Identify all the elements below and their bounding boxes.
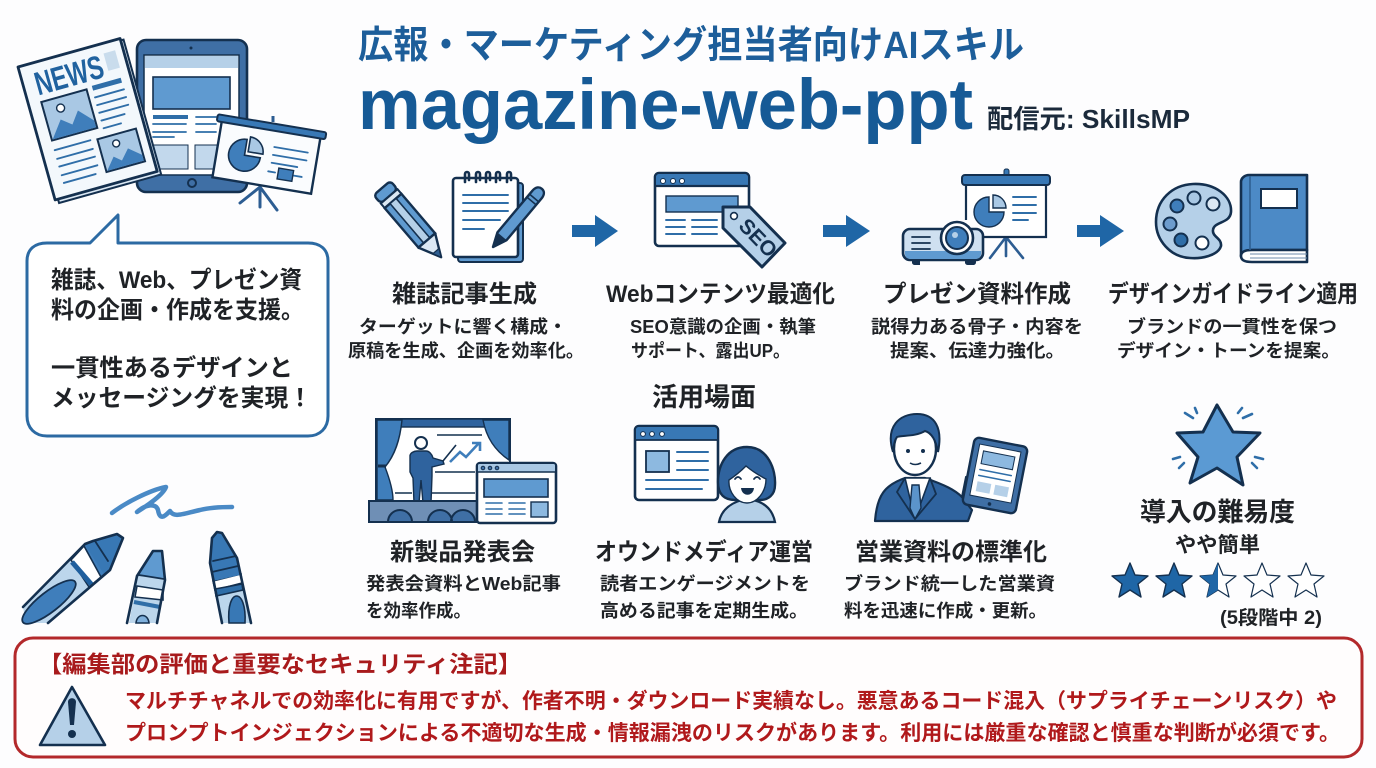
warning heading: 【編集部の評価と重要なセキュリティ注記】 — [38, 651, 522, 677]
crayon right — [210, 532, 251, 623]
callout text: 一貫性あるデザインと — [51, 354, 293, 382]
step 4: design guideline application — [1108, 175, 1358, 361]
source label: 配信元: SkillsMP — [987, 104, 1190, 134]
rating label: やや簡単 — [1175, 534, 1260, 557]
icon: crayons and scribble — [17, 487, 251, 630]
heading: Webコンテンツ最適化 — [606, 281, 835, 308]
icon: browser window and smiling woman — [635, 426, 775, 522]
panel: editorial evaluation and security warning — [15, 638, 1362, 757]
icon: newspaper: NEWS — [30, 48, 108, 102]
description: 提案、伝達力強化。 — [890, 340, 1065, 361]
callout text — [51, 266, 312, 412]
description: ターゲットに響く構成・ — [359, 316, 567, 337]
icon: presentation board tripod — [240, 116, 277, 210]
title: category line: 広報・マーケティング担当者向けAIスキル — [358, 25, 1024, 67]
icon: warning triangle — [40, 687, 105, 745]
description: を効率作成。 — [366, 600, 471, 621]
crayon left — [17, 534, 123, 630]
arrow 3 — [1077, 215, 1124, 247]
warning text: マルチチャネルでの効率化に有用ですが、作者不明・ダウンロード実績なし。悪意あるコード混入（サプライチェーンリスク）や — [125, 689, 1337, 713]
description — [871, 317, 1083, 361]
description — [630, 317, 816, 361]
description: 説得力ある骨子・内容を — [871, 317, 1083, 337]
scribble — [112, 487, 232, 517]
crayon middle — [127, 551, 165, 623]
icon: browser window — [655, 173, 749, 246]
heading: オウンドメディア運営 — [595, 538, 813, 566]
title: skill name: magazine-web-ppt — [358, 66, 973, 145]
icon: SEO tag — [723, 207, 785, 267]
heading: 営業資料の標準化 — [855, 539, 1047, 566]
use case 1: product launch — [366, 419, 561, 621]
description: 高める記事を定期生成。 — [600, 600, 808, 621]
star rating 2.5 of 5 shown — [1112, 563, 1324, 597]
icon: palette — [1156, 184, 1231, 258]
hero illustration: newspaper, tablet, presentation board — [18, 38, 326, 210]
heading: プレゼン資料作成 — [883, 280, 1071, 308]
description: 料を迅速に作成・更新。 — [844, 600, 1047, 621]
icon: presentation board — [207, 114, 326, 195]
icon: guideline book — [1241, 175, 1307, 262]
description: 読者エンゲージメントを — [600, 574, 810, 594]
description: ブランド統一した営業資 — [844, 573, 1055, 594]
description — [844, 573, 1055, 621]
icon: pencil — [374, 181, 449, 264]
icon: tablet — [137, 40, 247, 192]
icon: projector — [903, 222, 983, 265]
step 1: magazine article generation — [348, 172, 584, 361]
arrow 2 — [823, 215, 870, 247]
use case 3: sales material — [844, 414, 1055, 621]
icon: large star with sparkles — [1173, 405, 1263, 485]
description — [600, 574, 810, 621]
heading: 導入の難易度 — [1140, 497, 1295, 527]
difficulty rating panel — [1112, 405, 1324, 629]
icon: newspaper — [18, 38, 161, 204]
use case 2: owned media — [595, 426, 813, 621]
callout text: メッセージングを実現！ — [51, 384, 312, 412]
icon: notepad — [453, 172, 523, 262]
icon: projection screen — [962, 169, 1050, 258]
description: 原稿を生成、企画を効率化。 — [348, 340, 584, 361]
description: SEO意識の企画・執筆 — [630, 317, 816, 337]
step 3: presentation creation — [871, 169, 1083, 361]
icon: SEO tag: SEO — [734, 214, 781, 262]
description — [348, 316, 584, 361]
step 2: web content optimisation — [606, 173, 835, 361]
callout text: 雑誌、Web、プレゼン資 — [51, 266, 302, 294]
heading: 雑誌記事生成 — [392, 281, 537, 308]
icon: stage with browser window — [369, 419, 556, 523]
heading: use cases: 活用場面 — [652, 382, 756, 412]
description: 発表会資料とWeb記事 — [366, 574, 561, 594]
callout: speech bubble — [27, 215, 328, 436]
heading: 新製品発表会 — [390, 539, 535, 566]
description — [366, 574, 561, 621]
description: ブランドの一貫性を保つ — [1127, 316, 1337, 337]
callout text: 料の企画・作成を支援。 — [51, 297, 304, 324]
description: サポート、露出UP。 — [631, 340, 790, 361]
description: デザイン・トーンを提案。 — [1117, 340, 1340, 361]
icon: businessman with tablet — [875, 414, 1028, 521]
warning text — [125, 689, 1340, 745]
rating note: (5段階中 2) — [1220, 607, 1322, 629]
warning text: プロンプトインジェクションによる不適切な生成・情報漏洩のリスクがあります。利用には厳重な確認と慎重な判断が必須です。 — [125, 721, 1340, 745]
arrow 1 — [572, 215, 618, 247]
description — [1117, 316, 1340, 361]
icon: pen — [488, 185, 546, 251]
